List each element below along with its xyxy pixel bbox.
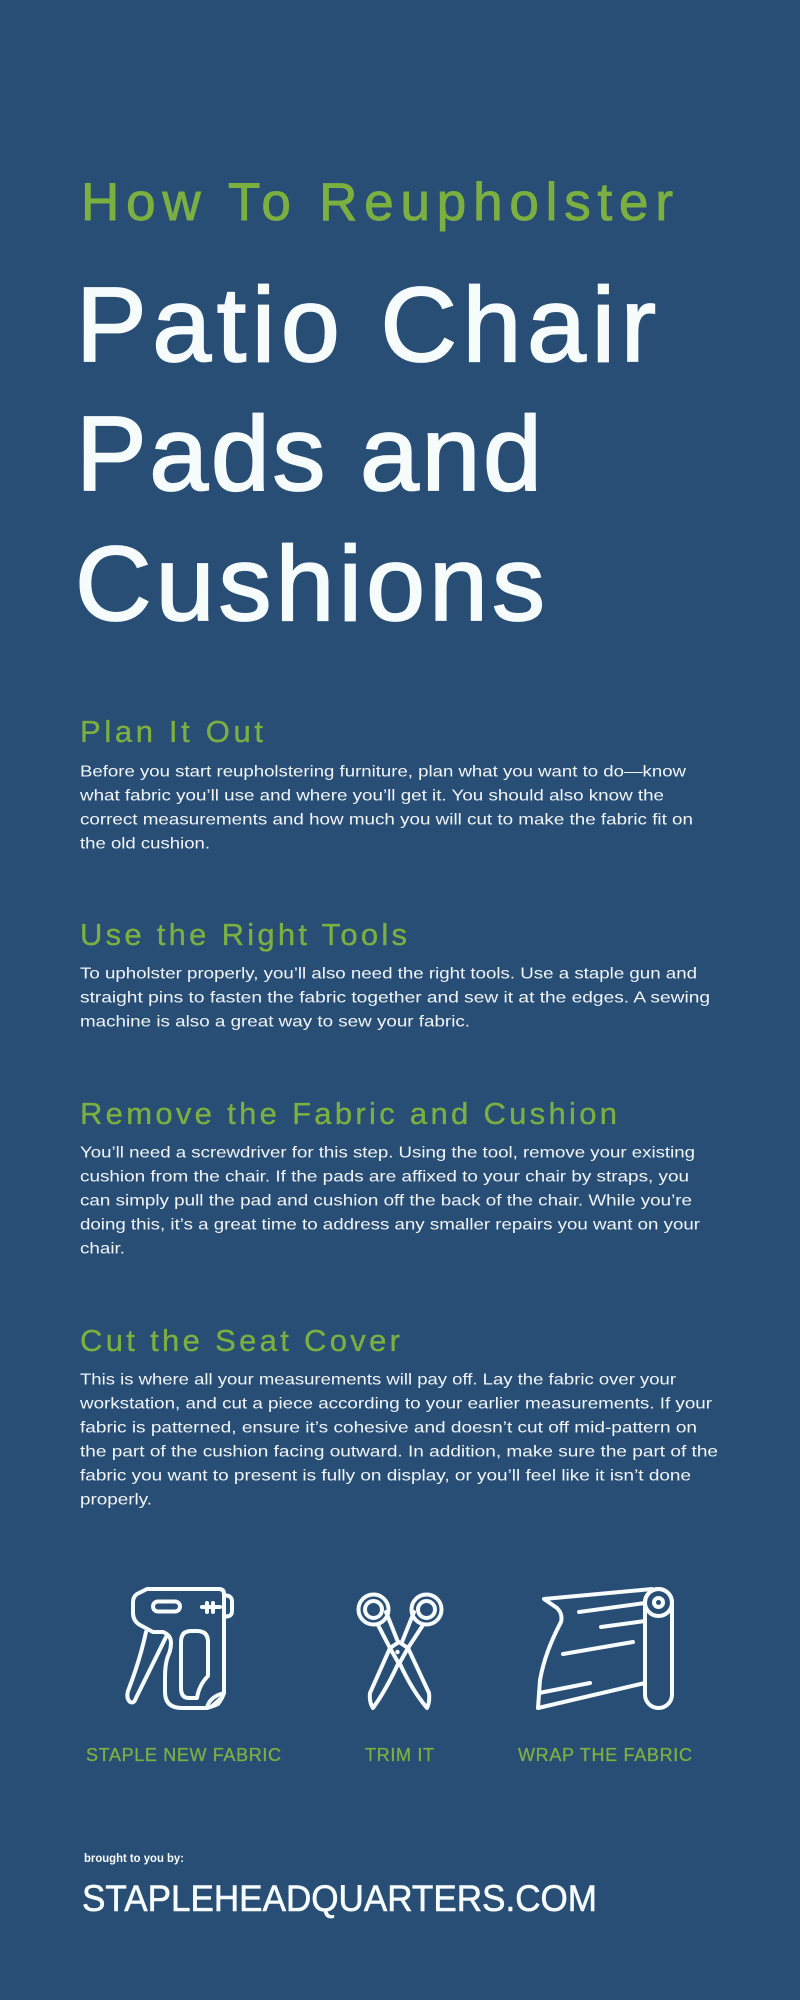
subtitle: How To Reupholster	[81, 173, 673, 232]
title: Cushions	[75, 525, 545, 643]
body text: properly.	[80, 1492, 152, 1508]
title: Pads and	[76, 395, 542, 513]
body text: straight pins to fasten the fabric together and sew it at the edges. A sewing	[80, 990, 710, 1006]
body text: You’ll need a screwdriver for this step. Using the tool, remove your existing	[80, 1144, 695, 1162]
heading: Remove the Fabric and Cushion	[80, 1096, 617, 1131]
body text: the part of the cushion facing outward. In addition, make sure the part of the	[80, 1444, 718, 1460]
website: STAPLEHEADQUARTERS.COM	[82, 1878, 597, 1919]
body text: doing this, it’s a great time to address any smaller repairs you want on your	[80, 1216, 701, 1234]
body text: chair.	[80, 1240, 125, 1258]
caption: trim it: TRIM IT	[365, 1745, 434, 1765]
heading: Plan It Out	[80, 714, 263, 749]
body text: workstation, and cut a piece according to your earlier measurements. If your	[79, 1396, 713, 1412]
section: cut the seat cover	[79, 1323, 718, 1508]
body text: fabric is patterned, ensure it’s cohesive and doesn’t cut off mid-pattern on	[80, 1420, 697, 1436]
caption: staple new fabric: STAPLE NEW FABRIC	[86, 1745, 281, 1765]
icon: fabric roll	[538, 1589, 672, 1708]
brought to you by: brought to you by:	[84, 1851, 184, 1865]
icon: staple gun	[127, 1589, 232, 1708]
icon: scissors	[358, 1594, 442, 1708]
body text: the old cushion.	[80, 836, 210, 852]
body text: fabric you want to present is fully on display, or you’ll feel like it isn’t done	[80, 1468, 691, 1484]
body text: can simply pull the pad and cushion off the back of the chair. While you’re	[80, 1192, 692, 1210]
body text	[79, 764, 693, 852]
heading: Cut the Seat Cover	[80, 1323, 400, 1358]
body text: This is where all your measurements will pay off. Lay the fabric over your	[80, 1372, 677, 1388]
body text: machine is also a great way to sew your fabric.	[80, 1014, 470, 1030]
section: plan it out	[79, 714, 693, 852]
body text	[80, 966, 710, 1030]
body text	[80, 1144, 701, 1258]
section: remove the fabric and cushion	[80, 1096, 701, 1258]
caption: wrap the fabric: WRAP THE FABRIC	[518, 1745, 692, 1765]
body text	[79, 1372, 718, 1508]
body text: Before you start reupholstering furniture, plan what you want to do—know	[80, 764, 687, 780]
section: use the right tools	[80, 917, 710, 1030]
body text: cushion from the chair. If the pads are affixed to your chair by straps, you	[80, 1168, 689, 1186]
title	[75, 266, 656, 643]
body text: what fabric you’ll use and where you’ll get it. You should also know the	[79, 788, 664, 804]
body text: To upholster properly, you’ll also need the right tools. Use a staple gun and	[80, 966, 697, 982]
heading: Use the Right Tools	[80, 917, 407, 952]
body text: correct measurements and how much you will cut to make the fabric fit on	[80, 812, 693, 828]
title: Patio Chair	[76, 266, 656, 384]
